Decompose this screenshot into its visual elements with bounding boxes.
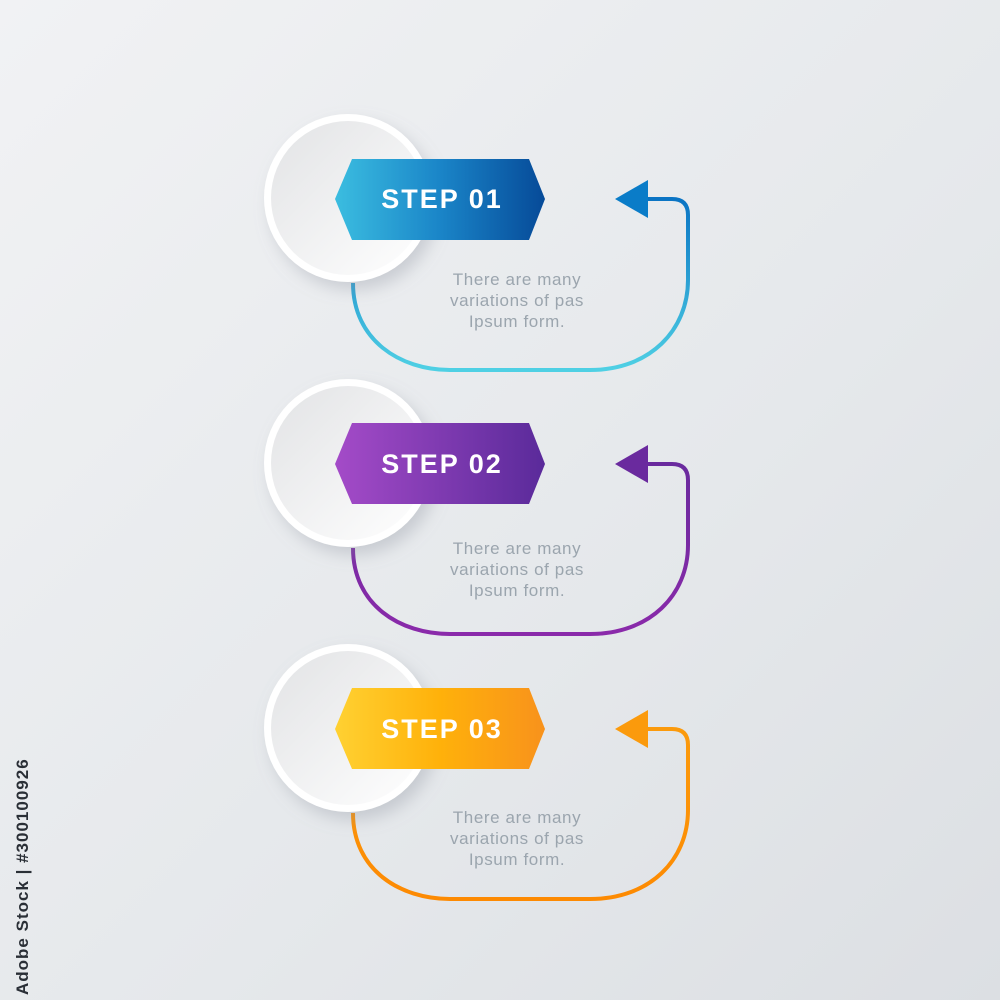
- step 2: [264, 379, 688, 634]
- circle 2: [264, 379, 432, 547]
- circle 3: [264, 644, 432, 812]
- circle 1: [264, 114, 432, 282]
- label: step 02: STEP 02: [381, 449, 503, 479]
- label: step 01: [335, 159, 545, 240]
- text block 2: There are many: [453, 539, 581, 558]
- connector arrow 1: [353, 180, 688, 370]
- text block 3: variations of pas: [450, 829, 584, 848]
- text block 2: variations of pas: [450, 560, 584, 579]
- label: step 01: STEP 01: [381, 184, 503, 214]
- label: step 03: STEP 03: [381, 714, 503, 744]
- text block 1: variations of pas: [450, 291, 584, 310]
- text block 2: Ipsum form.: [469, 581, 565, 600]
- label: step 02: [335, 423, 545, 504]
- text block 3: Ipsum form.: [469, 850, 565, 869]
- connector arrow 2: [353, 445, 688, 634]
- text block 1: Ipsum form.: [469, 312, 565, 331]
- connector arrow 3: [353, 710, 688, 899]
- label: step 03: [335, 688, 545, 769]
- text block 3: There are many: [453, 808, 581, 827]
- step 3: [264, 644, 688, 899]
- watermark id: Adobe Stock | #300100926: [13, 758, 32, 995]
- step 1: [264, 114, 688, 370]
- text block 1: There are many: [453, 270, 581, 289]
